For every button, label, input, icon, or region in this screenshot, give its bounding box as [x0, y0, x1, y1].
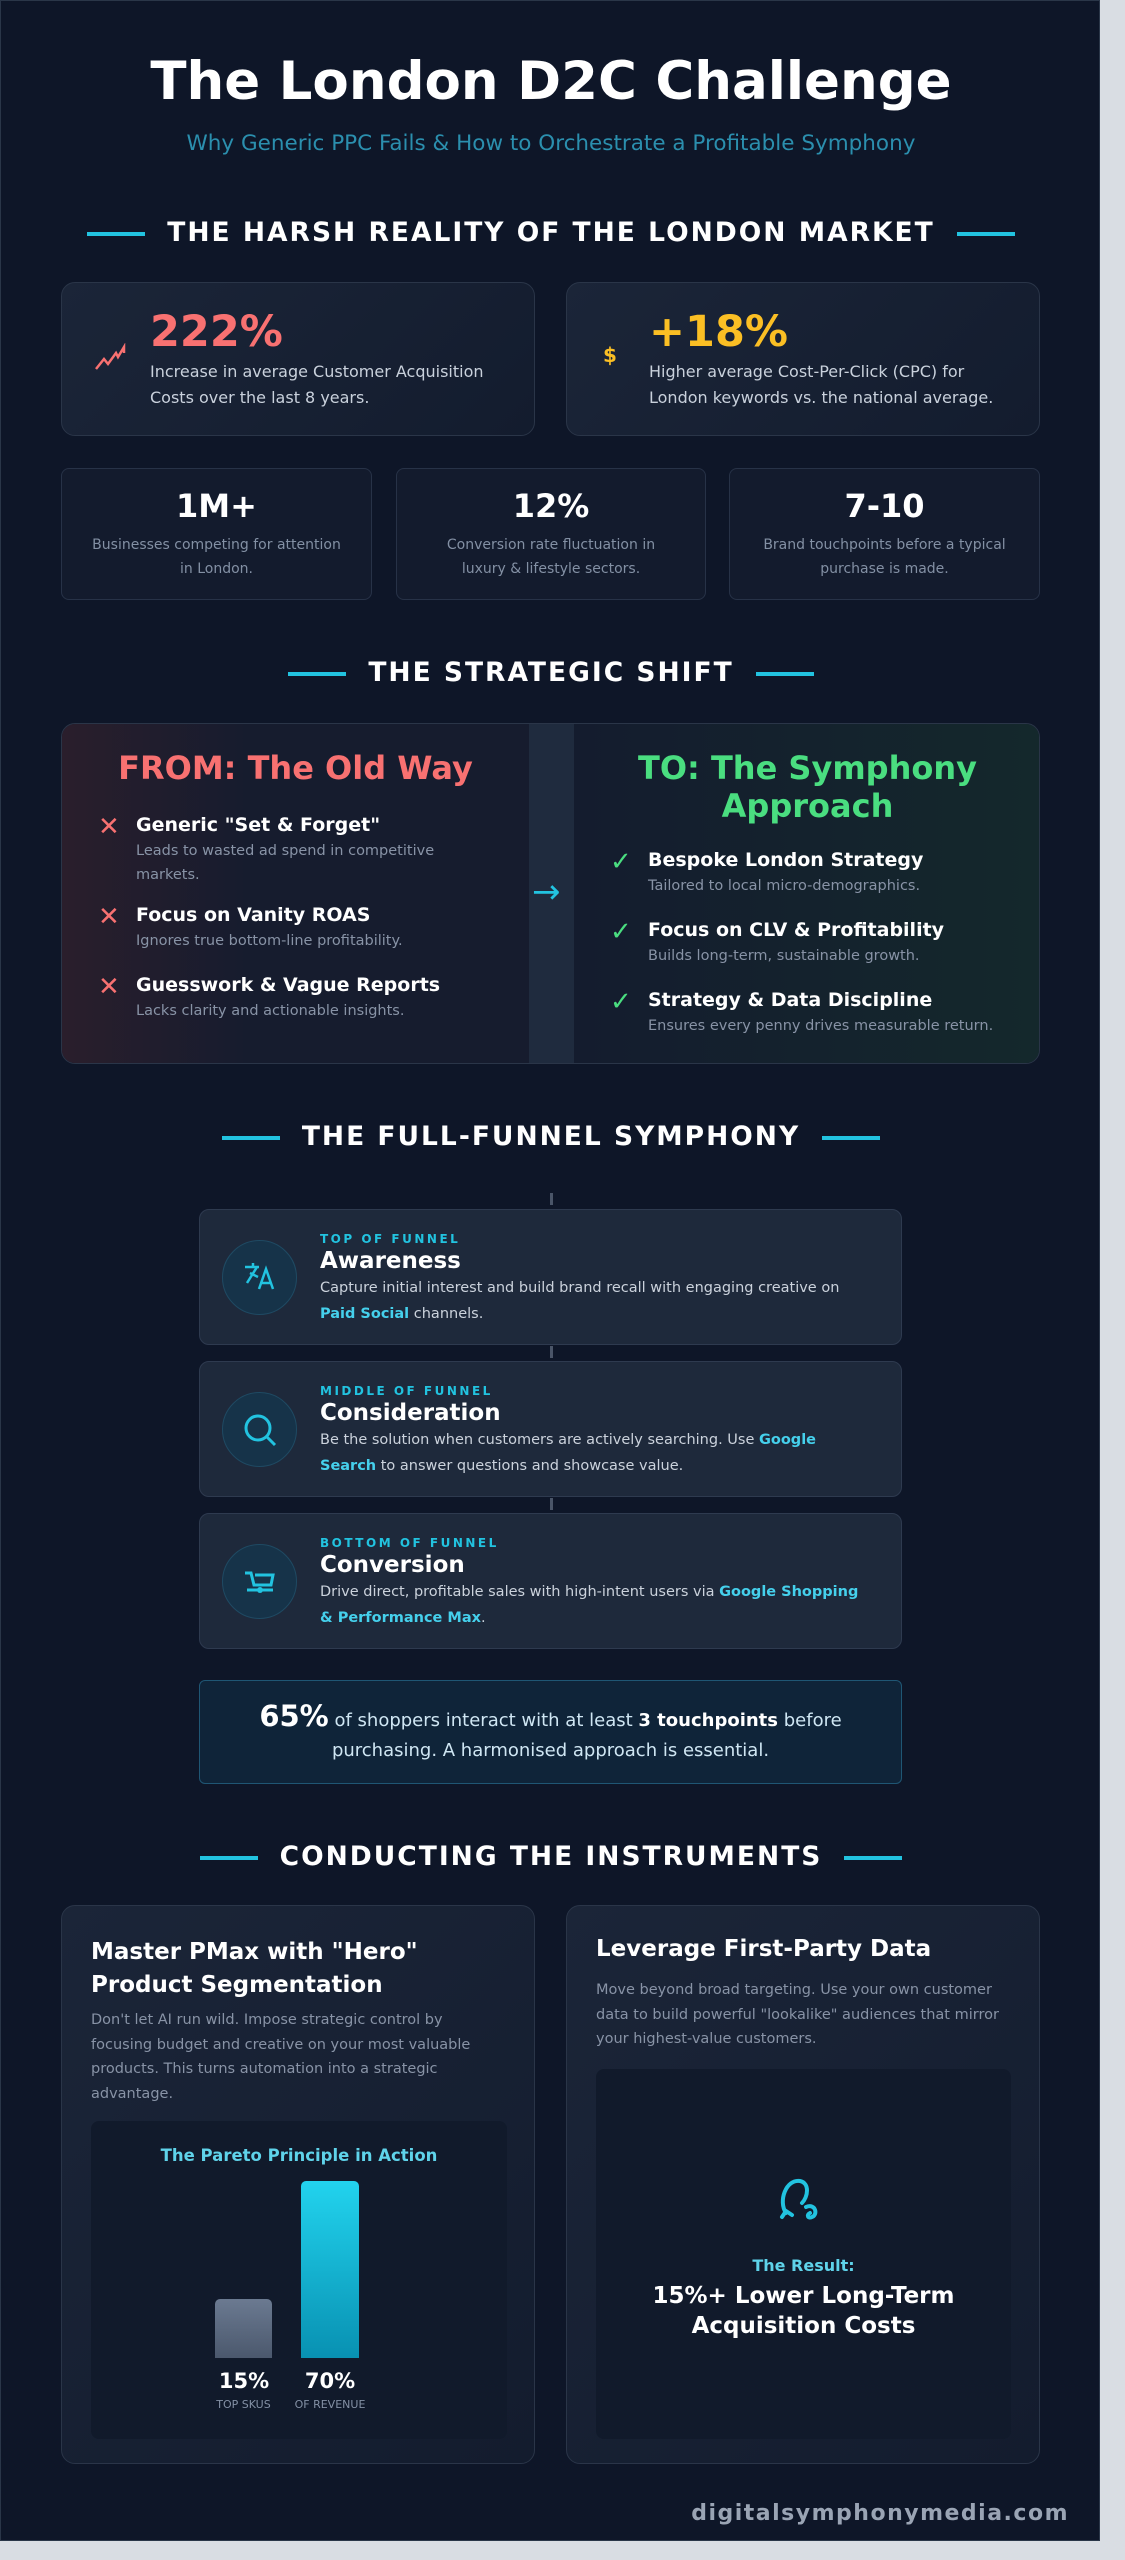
panel: symphony approach: ✓ — [610, 917, 632, 947]
item: generic — [98, 812, 434, 883]
heading: full-funnel: THE FULL-FUNNEL SYMPHONY — [302, 1121, 800, 1152]
item: guesswork: Guesswork & Vague Reports — [136, 974, 440, 996]
item: generic: markets. — [136, 867, 200, 883]
icon: search — [222, 1392, 297, 1467]
stat: 7-10 — [729, 468, 1040, 600]
funnel: conversion — [199, 1513, 902, 1649]
panel: symphony approach: ✓ — [610, 847, 632, 877]
bar chart: TOP SKUS — [216, 2398, 271, 2411]
item: clv: Builds long-term, sustainable growth. — [648, 948, 920, 964]
funnel: awareness: Awareness — [320, 1248, 461, 1274]
stat text — [649, 307, 993, 407]
icon: cart — [222, 1544, 297, 1619]
stat: 12% — [396, 468, 706, 600]
item: bespoke — [610, 847, 923, 894]
card title: Leverage First-Party Data — [596, 1936, 931, 1962]
icon: dollar: $ — [603, 343, 617, 367]
item: vanity roas: Focus on Vanity ROAS — [136, 904, 370, 926]
item: data discipline — [610, 987, 993, 1034]
item: data discipline: Ensures every penny drives measurable return. — [648, 1018, 993, 1034]
item: guesswork — [98, 972, 440, 1019]
item: vanity roas: Ignores true bottom-line profitability. — [136, 933, 403, 949]
panel: old way: ✕ — [98, 902, 120, 932]
item: guesswork: Lacks clarity and actionable insights. — [136, 1003, 404, 1019]
heading: strategic shift — [288, 657, 814, 688]
stat card: 222% — [61, 282, 535, 436]
result box — [596, 2069, 1011, 2439]
panel: old way: ✕ — [98, 972, 120, 1002]
panel: symphony approach — [574, 724, 1041, 1065]
panel: from/to comparison — [61, 723, 1040, 1064]
item: clv — [610, 917, 944, 964]
funnel: conversion: Drive direct, profitable sales with high-intent users via Google Shopping — [320, 1584, 858, 1600]
card title — [91, 1939, 418, 1998]
bar chart: 70% — [305, 2369, 355, 2393]
stat text: London keywords vs. the national average. — [649, 388, 993, 407]
heading: to: Approach — [722, 787, 893, 825]
card: pmax — [61, 1905, 535, 2464]
item: bespoke: Bespoke London Strategy — [648, 849, 923, 871]
callout: 65% — [199, 1680, 902, 1784]
card description: Move beyond broad targeting. Use your own customer data to build powerful "lookalike" audiences that mirror your highest-value customers. — [596, 1982, 999, 2047]
stat text: Costs over the last 8 years. — [150, 388, 369, 407]
stat: 12%: Conversion rate fluctuation in — [447, 537, 655, 553]
stat: 12%: 12% — [513, 487, 589, 525]
heading: harsh reality: THE HARSH REALITY OF THE LONDON MARKET — [167, 217, 935, 248]
funnel: awareness: TOP OF FUNNEL — [320, 1232, 460, 1246]
arrow column — [529, 724, 574, 1065]
item: generic: Leads to wasted ad spend in competitive — [136, 843, 434, 859]
card title: Product Segmentation — [91, 1972, 383, 1998]
panel: old way: ✕ — [98, 812, 120, 842]
callout: 65%: 65% of shoppers interact with at least 3 touchpoints before — [259, 1699, 842, 1733]
title: The London D2C Challenge — [150, 51, 952, 112]
bar chart: OF REVENUE — [295, 2398, 365, 2411]
item: generic: Generic "Set & Forget" — [136, 814, 380, 836]
stat: 7-10: Brand touchpoints before a typical — [763, 537, 1006, 553]
result box: The Result: — [752, 2256, 855, 2275]
stat: 1M+: 1M+ — [176, 487, 257, 525]
stat card: +18% — [566, 282, 1040, 436]
footer: digitalsymphonymedia.com — [691, 2501, 1069, 2526]
panel: symphony approach: ✓ — [610, 987, 632, 1017]
bar chart: 15% — [219, 2369, 269, 2393]
stat text: Increase in average Customer Acquisition — [150, 362, 484, 381]
card description — [91, 2012, 470, 2102]
bar chart: The Pareto Principle in Action — [161, 2146, 437, 2165]
funnel: awareness — [199, 1209, 902, 1345]
item: data discipline: Strategy & Data Discipline — [648, 989, 932, 1011]
stat text — [150, 307, 484, 407]
funnel: consideration: Consideration — [320, 1400, 501, 1426]
funnel: awareness: Capture initial interest and build brand recall with engaging creative on — [320, 1280, 839, 1296]
heading: from: FROM: The Old Way — [118, 749, 473, 787]
stat: 1M+: in London. — [180, 561, 253, 577]
funnel: awareness: Paid Social channels. — [320, 1306, 483, 1322]
stat text: 222% — [150, 307, 283, 357]
bar chart — [91, 2121, 507, 2439]
card description: focusing budget and creative on your most valuable — [91, 2036, 470, 2052]
stat text: Higher average Cost-Per-Click (CPC) for — [649, 362, 964, 381]
heading: to: TO: The Symphony — [638, 749, 977, 787]
funnel: consideration: Search to answer questions and showcase value. — [320, 1458, 683, 1474]
card description: Don't let AI run wild. Impose strategic control by — [91, 2012, 443, 2028]
heading: strategic shift: THE STRATEGIC SHIFT — [368, 657, 734, 688]
card title: Master PMax with "Hero" — [91, 1939, 418, 1965]
subtitle: Why Generic PPC Fails & How to Orchestrate a Profitable Symphony — [187, 131, 915, 156]
icon: trend up — [95, 343, 126, 370]
icon: fingerprint swirl — [780, 2178, 818, 2220]
result box: 15%+ Lower Long-Term — [652, 2283, 954, 2309]
arrow column: → — [532, 872, 560, 912]
stat text: +18% — [649, 307, 788, 357]
funnel: conversion: & Performance Max. — [320, 1610, 486, 1626]
icon: translate — [222, 1240, 297, 1315]
stat: 1M+: Businesses competing for attention — [92, 537, 341, 553]
funnel: consideration: Be the solution when customers are actively searching. Use Google — [320, 1432, 816, 1448]
heading: instruments: CONDUCTING THE INSTRUMENTS — [280, 1841, 822, 1872]
item: bespoke: Tailored to local micro-demographics. — [648, 878, 920, 894]
heading: to — [638, 749, 977, 825]
result box: Acquisition Costs — [692, 2313, 915, 2339]
stat: 7-10: purchase is made. — [820, 561, 949, 577]
panel: old way — [62, 724, 529, 1065]
item: vanity roas — [98, 902, 403, 949]
funnel: consideration: MIDDLE OF FUNNEL — [320, 1384, 493, 1398]
stat: 7-10: 7-10 — [844, 487, 925, 525]
card description: advantage. — [91, 2086, 173, 2102]
stat: 1M+ — [61, 468, 372, 600]
funnel: consideration — [199, 1361, 902, 1497]
card: first-party data — [566, 1905, 1040, 2464]
funnel: conversion: BOTTOM OF FUNNEL — [320, 1536, 499, 1550]
stat: 12%: luxury & lifestyle sectors. — [462, 561, 640, 577]
item: clv: Focus on CLV & Profitability — [648, 919, 944, 941]
callout: 65%: purchasing. A harmonised approach is essential. — [332, 1740, 769, 1761]
funnel: conversion: Conversion — [320, 1552, 465, 1578]
card description: products. This turns automation into a strategic — [91, 2061, 438, 2077]
